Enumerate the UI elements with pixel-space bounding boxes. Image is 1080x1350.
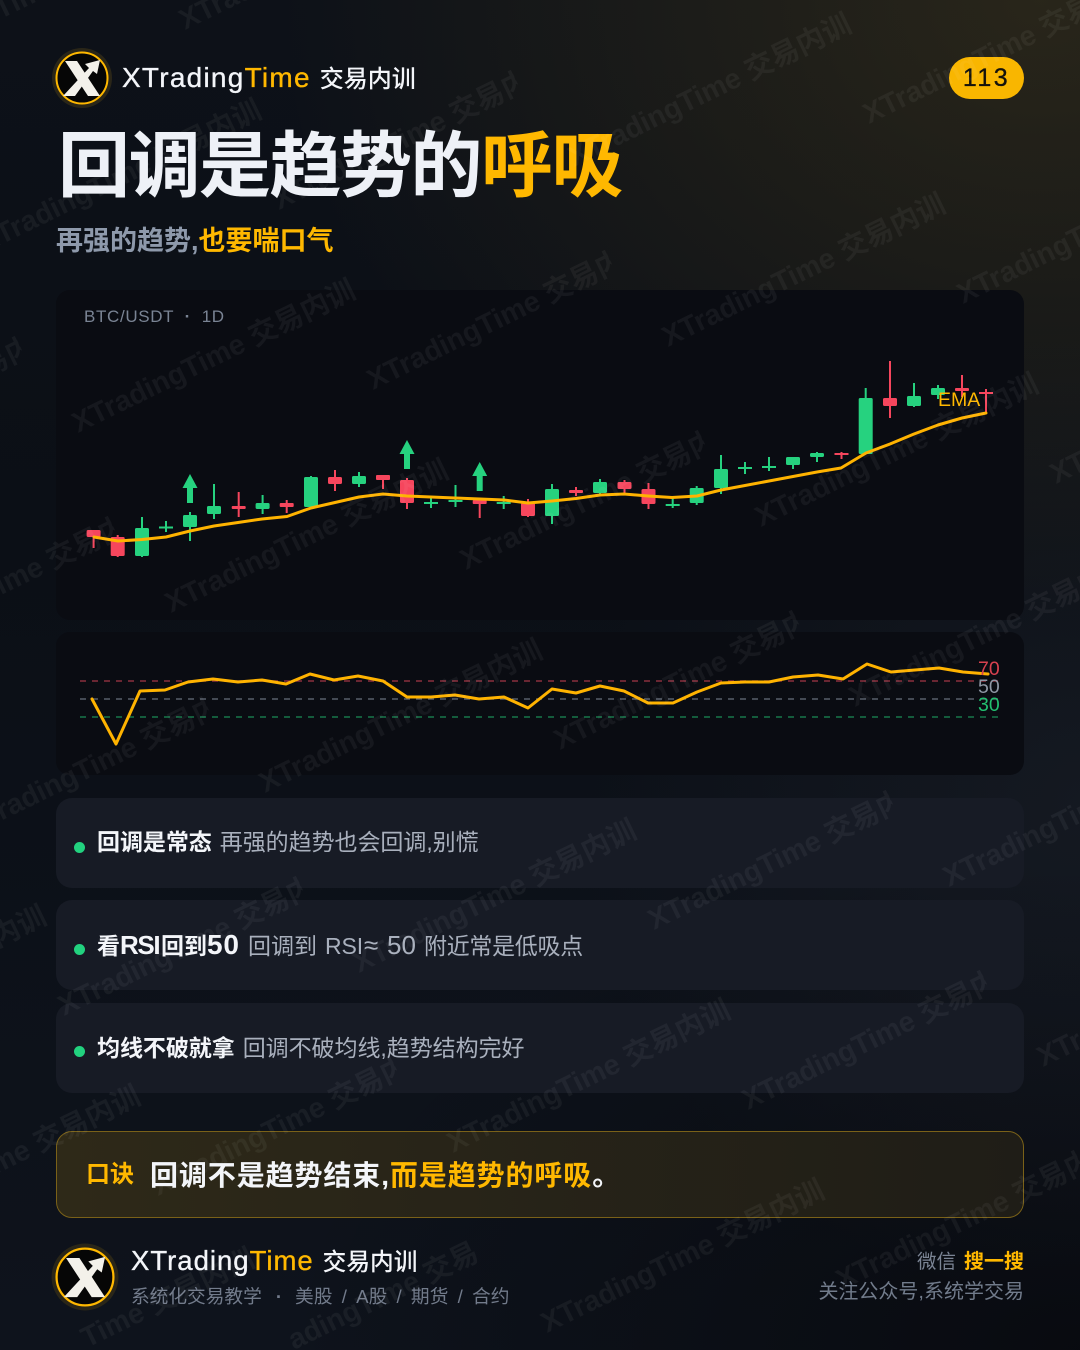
footer brand name: XTradingTime 交易内训: [131, 1245, 417, 1276]
footer logo: [52, 1244, 118, 1310]
oversold line: [80, 716, 1000, 718]
watermark pattern: XTradingTime 交易内训: [67, 274, 360, 439]
watermark pattern: XTradingTime 交易内训: [442, 994, 735, 1159]
watermark pattern: XTradingTime 交易内训: [750, 368, 1043, 533]
overbought line: [80, 680, 1000, 682]
watermark pattern: XTradingTime 交易内训: [455, 411, 748, 576]
watermark pattern: XTradingTime 交易内训: [643, 771, 936, 936]
tip text: 50: [207, 929, 240, 960]
subtitle: 再强的趋势,也要喘口气: [56, 226, 334, 256]
title: 回调是趋势的呼吸: [58, 127, 622, 207]
tip text: 回调到: [248, 933, 317, 959]
callout: mnemonic: [56, 1131, 1024, 1218]
candlestick chart: [86, 361, 993, 557]
tip text: 均线不破就拿 回调不破均线,趋势结构完好: [97, 1035, 524, 1061]
level 70: 70: [978, 658, 1000, 680]
watermark pattern: XTradingTime 交易内训: [268, 51, 561, 216]
tip text: 回到: [161, 933, 207, 959]
watermark pattern: XTradingTime 交易内训: [549, 591, 842, 756]
watermark pattern: XTradingTime 交易内训: [737, 951, 1030, 1116]
issue badge: 113: [963, 64, 1010, 92]
watermark pattern: XTradingTime 交易内训: [563, 8, 856, 173]
watermark pattern: XTradingTime 交易内训: [362, 231, 655, 396]
issue badge: [949, 57, 1024, 99]
callout text: 回调不是趋势结束,而是趋势的呼吸。: [150, 1160, 621, 1191]
bullet: [74, 842, 85, 853]
tip text: RSI: [325, 933, 363, 959]
panel: price chart: [56, 290, 1024, 620]
watermark pattern: XTradingTime 交易内训: [348, 814, 641, 979]
tip text: 看: [97, 933, 120, 959]
panel: RSI chart: [56, 632, 1024, 775]
tip text: ≈: [364, 930, 378, 960]
header brand name: XTradingTime 交易内训: [122, 62, 416, 93]
watermark pattern: XTradingTime 交易内训: [53, 857, 346, 1022]
EMA line: [94, 413, 986, 541]
tip text: [97, 929, 583, 960]
arrow: buy signal 2: [400, 440, 414, 469]
tip text: 附近常是低吸点: [424, 933, 583, 959]
panel: tip 3: [56, 1003, 1024, 1093]
RSI chart: [80, 658, 1000, 746]
level 30: 30: [978, 694, 1000, 716]
bullet: [74, 944, 85, 955]
callout label: 口诀: [86, 1161, 134, 1188]
chart pair label: BTC/USDT · 1D: [84, 307, 225, 326]
level 50: 50: [978, 676, 1000, 698]
watermark pattern: XTradingTime 交易内训: [147, 1037, 440, 1202]
arrow: buy signal 1: [182, 474, 198, 503]
footer tagline: 系统化交易教学 · 美股 / A股 / 期货 / 合约: [131, 1286, 510, 1307]
header logo: [52, 48, 112, 108]
panel: tip 2: [56, 900, 1024, 990]
RSI line: [92, 664, 988, 744]
EMA label: EMA: [938, 389, 980, 411]
arrow: buy signal 3: [472, 462, 487, 491]
watermark pattern: XTradingTime 交易内训: [160, 454, 453, 619]
green candles: [135, 383, 945, 557]
footer follow prompt: 微信 搜一搜: [917, 1251, 1024, 1273]
tip text: 回调是常态 再强的趋势也会回调,别慌: [97, 829, 479, 855]
midline: [80, 698, 1000, 700]
watermark pattern: XTradingTime 交易内训: [254, 634, 547, 799]
bullet: [74, 1046, 85, 1057]
panel: tip 1: [56, 798, 1024, 888]
watermark pattern: XTradingTime 交易内训: [657, 188, 950, 353]
footer follow note: 关注公众号,系统学交易: [818, 1281, 1024, 1303]
tip text: RSI: [120, 930, 159, 960]
watermark pattern: XTradingTime 交易内训: [536, 1174, 829, 1339]
red candles: [87, 361, 993, 557]
tip text: 50: [387, 930, 416, 960]
